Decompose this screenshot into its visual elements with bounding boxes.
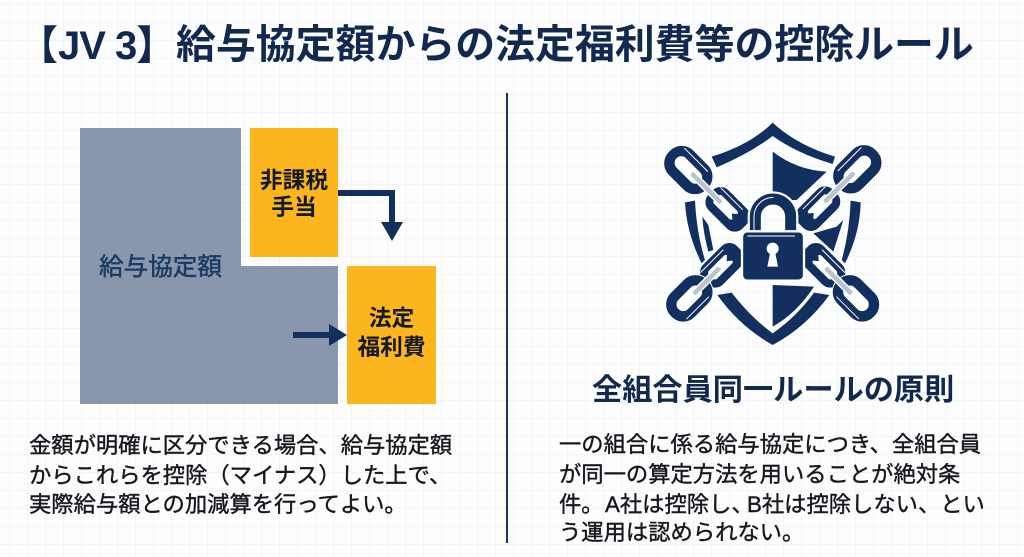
left explanation text: 金額が明確に区分できる場合、給与協定額: [29, 433, 452, 458]
right explanation text: [559, 432, 985, 545]
box: statutory welfare costs: [347, 266, 436, 404]
label: non-taxable allowance: 非課税: [260, 167, 328, 193]
salary amount L-shaped block: [80, 128, 338, 404]
box: non-taxable allowance: [250, 128, 338, 257]
arrow: salary into welfare: [293, 324, 347, 346]
heading: same rule principle: 全組合員同一ルールの原則: [592, 374, 954, 407]
right explanation text: 一の組合に係る給与協定につき、全組合員: [559, 432, 981, 457]
right explanation text: 件。: [559, 492, 604, 517]
label: non-taxable allowance: 手当: [271, 194, 317, 220]
panel: left diagram: [80, 128, 436, 404]
title: 【JV 3】: [18, 24, 176, 68]
right explanation text: が同一の算定方法を用いることが絶対条: [559, 462, 960, 487]
label: statutory welfare costs: 法定: [369, 305, 414, 331]
label: salary amount: 給与協定額: [99, 254, 222, 281]
label: statutory welfare costs: 福利費: [357, 334, 426, 360]
label: statutory welfare costs: [357, 305, 426, 360]
left explanation text: からこれらを控除（マイナス）した上で、: [29, 463, 451, 488]
arrow: allowance down to welfare: [338, 190, 403, 241]
title: 給与協定額からの法定福利費等の控除ルール: [176, 23, 974, 67]
label: non-taxable allowance: [260, 167, 328, 220]
left explanation text: 実際給与額との加減算を行ってよい。: [29, 492, 407, 517]
left explanation text: [29, 433, 452, 517]
right explanation text: B社は控除しない、とい: [747, 492, 985, 517]
vertical divider: [506, 93, 508, 543]
icon: shield with chains and padlock: [664, 122, 882, 345]
right explanation text: A社は控除し、: [605, 492, 754, 517]
right explanation text: う運用は認められない。: [559, 520, 804, 545]
